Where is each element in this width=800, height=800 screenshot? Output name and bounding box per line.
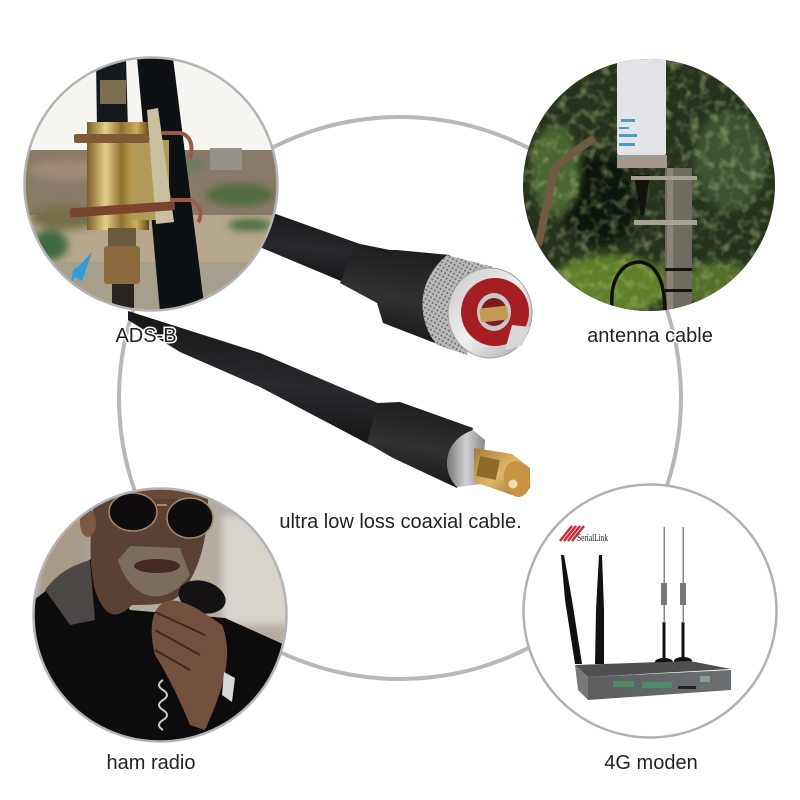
photo: 4G router: [524, 484, 776, 738]
microphone: [178, 580, 226, 614]
cable loop: [612, 262, 665, 312]
hand: [152, 601, 227, 730]
curly mic cord: [159, 680, 167, 730]
hair: [114, 490, 206, 499]
sunglasses: [109, 493, 213, 538]
support pole: [665, 168, 692, 318]
blue arrow: [71, 252, 92, 283]
sky: [30, 60, 272, 150]
bottom SMA cable assembly: [128, 311, 533, 499]
N connector knurled body: [422, 255, 493, 355]
SMA gold body: [474, 448, 533, 499]
jacket: [34, 555, 285, 745]
finger creases: [155, 612, 205, 670]
city skyline: [26, 150, 276, 215]
antenna radome: [617, 58, 666, 155]
tree trunk: [538, 138, 594, 245]
mouth: [134, 559, 180, 573]
large connecting ring: [119, 117, 681, 679]
router body: [575, 661, 731, 700]
upper cable jacket: [262, 208, 360, 284]
brand logo: [560, 526, 608, 544]
photo: outdoor antenna on mast: [523, 58, 775, 318]
foliage: [523, 59, 775, 311]
lower heat-shrink sleeve: [367, 402, 473, 488]
label: ADS-B: ADS-B: [115, 325, 177, 347]
upper heat-shrink sleeve: [340, 243, 450, 345]
SMA silver nut: [447, 430, 485, 487]
face and neck: [90, 495, 208, 614]
top N-type cable assembly: [262, 208, 532, 358]
brand logo: SerialLink: [577, 532, 608, 544]
N connector below clamp: [108, 228, 136, 246]
lower cable jacket: [128, 311, 380, 445]
label: 4G moden: 4G moden: [604, 752, 698, 774]
blurred background: [36, 499, 285, 644]
N connector face: [448, 268, 532, 358]
antenna mast: [96, 61, 128, 122]
brass clamp block: [87, 122, 149, 230]
watch: [222, 672, 235, 702]
photo: man with ham radio mic: [34, 488, 292, 745]
U-bolts: [74, 134, 149, 143]
label: ultra low loss coaxial cable: ultra low loss coaxial cable.: [279, 511, 522, 533]
photo: ADS-B antenna mount: [24, 57, 278, 315]
label: ham radio: ham radio: [107, 752, 195, 774]
label: antenna cable: antenna cable: [587, 325, 713, 347]
black stub antennas: [561, 555, 582, 664]
magnetic whip antennas: [655, 527, 692, 666]
